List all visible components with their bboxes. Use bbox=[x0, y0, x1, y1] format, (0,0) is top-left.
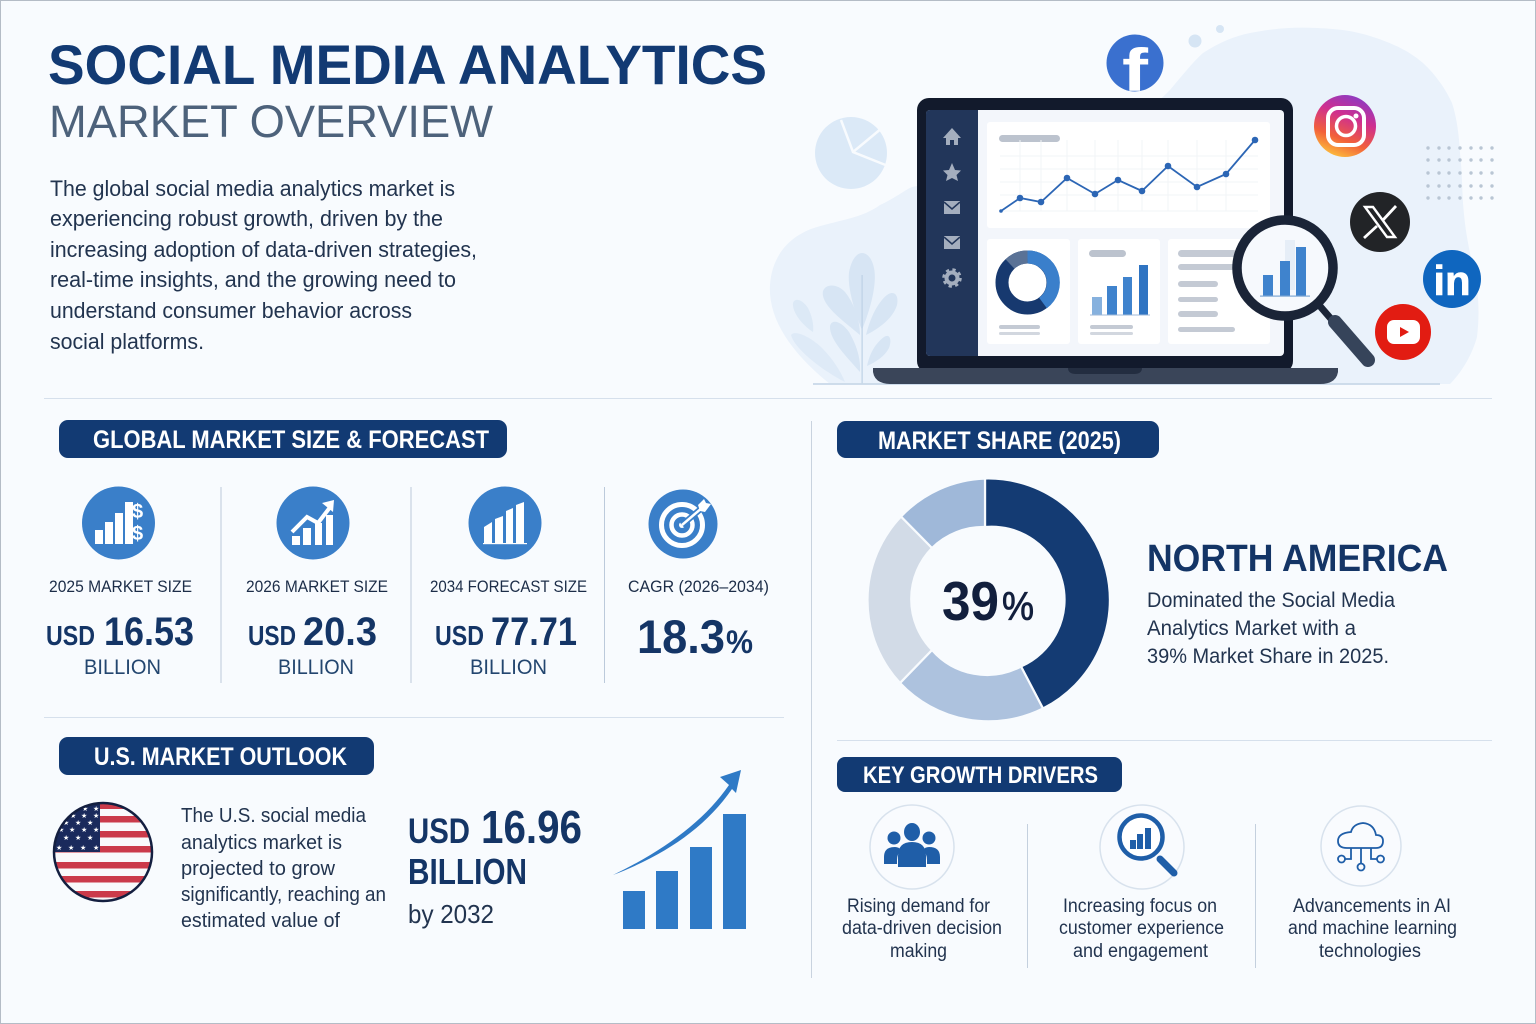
stat: 2026 market size: BILLION bbox=[278, 656, 354, 679]
panel: market share bbox=[837, 421, 1448, 721]
driver separators bbox=[1028, 824, 1256, 968]
driver: customer experience: customer experience bbox=[1059, 918, 1224, 939]
icon: US flag: ★★★★ bbox=[56, 844, 99, 852]
growth bar chart with arrow bbox=[613, 770, 746, 929]
stat: 2025 market size: 2025 MARKET SIZE bbox=[49, 577, 192, 596]
driver: AI and machine learning: Advancements in AI bbox=[1293, 896, 1451, 917]
heading: market share: MARKET SHARE (2025) bbox=[878, 427, 1121, 455]
intro paragraph: experiencing robust growth, driven by the bbox=[50, 206, 443, 231]
sidebar icons bbox=[943, 128, 961, 286]
icon: youtube bbox=[1375, 304, 1431, 360]
icon: facebook: f bbox=[1122, 37, 1149, 104]
heading: global market: GLOBAL MARKET SIZE & FORECAST bbox=[93, 426, 489, 454]
U.S. value: USD bbox=[408, 812, 470, 851]
heading: key growth drivers bbox=[837, 757, 1122, 792]
icon: US flag: ★★ bbox=[82, 805, 99, 813]
stat: 2034 forecast size: 2034 FORECAST SIZE bbox=[430, 577, 587, 596]
U.S. value: 16.96 bbox=[481, 801, 582, 853]
title: SOCIAL MEDIA ANALYTICS bbox=[48, 33, 767, 96]
stat: CAGR: 18.3 bbox=[637, 610, 725, 663]
intro paragraph: The global social media analytics market is bbox=[50, 176, 455, 201]
U.S. outlook text: analytics market is bbox=[181, 832, 342, 854]
driver: data-driven decision making bbox=[842, 805, 1002, 962]
stat: 2025 market size: $ bbox=[132, 501, 143, 523]
dividers bbox=[44, 398, 1492, 978]
stat: 2025 market size: USD bbox=[46, 620, 95, 651]
region callout bbox=[1147, 538, 1448, 668]
driver: data-driven decision making: data-driven decision bbox=[842, 918, 1002, 939]
stat: 2026 market size: USD bbox=[248, 620, 296, 651]
plant bbox=[791, 253, 897, 384]
dot grid bbox=[1426, 146, 1494, 200]
heading: key growth drivers: KEY GROWTH DRIVERS bbox=[863, 762, 1098, 789]
stat: 2034 forecast size: 77.71 bbox=[491, 610, 577, 654]
list card bbox=[1168, 239, 1270, 344]
stat: 2026 market size: 2026 MARKET SIZE bbox=[246, 577, 388, 596]
driver: data-driven decision making: Rising demand for bbox=[847, 896, 991, 917]
region callout: Analytics Market with a bbox=[1147, 617, 1356, 640]
region callout: NORTH AMERICA bbox=[1147, 538, 1448, 580]
icon: X bbox=[1350, 192, 1410, 252]
laptop base bbox=[873, 368, 1338, 384]
U.S. outlook text bbox=[181, 805, 386, 932]
decorative pie bbox=[815, 117, 888, 189]
stat: 2025 market size: $ bbox=[132, 523, 143, 545]
bar card bbox=[1078, 239, 1160, 344]
stat: 2025 market size: BILLION bbox=[84, 656, 161, 679]
icon: US flag: ★★★ bbox=[70, 812, 99, 820]
panel: global market size and forecast bbox=[46, 420, 769, 683]
stat: CAGR: % bbox=[726, 624, 753, 660]
driver: customer experience bbox=[1059, 805, 1224, 962]
donut value: 39 bbox=[942, 570, 999, 632]
background blob bbox=[770, 28, 1478, 384]
title: MARKET OVERVIEW bbox=[49, 96, 494, 147]
stat: 2034 forecast size: BILLION bbox=[470, 656, 547, 679]
icon: US flag: ★★★ bbox=[63, 834, 93, 842]
driver: customer experience: and engagement bbox=[1073, 941, 1209, 962]
heading: market share bbox=[837, 421, 1159, 458]
driver: AI and machine learning bbox=[1288, 806, 1457, 962]
panel: key growth drivers bbox=[837, 757, 1457, 968]
stat: 2025 market size: 16.53 bbox=[104, 610, 194, 654]
U.S. value: BILLION bbox=[408, 851, 527, 892]
stat: 2026 market size: 20.3 bbox=[303, 610, 377, 654]
region callout: 39% Market Share in 2025. bbox=[1147, 645, 1389, 668]
intro paragraph: increasing adoption of data-driven strategies, bbox=[50, 237, 477, 262]
decorative bubbles bbox=[1188, 25, 1224, 48]
donut chart bbox=[867, 478, 1110, 721]
stat: CAGR bbox=[628, 490, 769, 663]
driver: data-driven decision making: making bbox=[890, 941, 947, 962]
donut value bbox=[942, 570, 1034, 632]
stat: 2034 forecast size bbox=[430, 486, 587, 679]
stat: 2026 market size bbox=[246, 486, 388, 679]
intro paragraph: social platforms. bbox=[50, 329, 204, 354]
U.S. outlook text: The U.S. social media bbox=[181, 805, 367, 827]
icon: US flag: ★★★★ bbox=[58, 826, 99, 834]
U.S. outlook text: projected to grow bbox=[181, 858, 336, 880]
donut value: % bbox=[1002, 585, 1034, 629]
stat: 2034 forecast size: USD bbox=[435, 620, 484, 651]
driver: customer experience: Increasing focus on bbox=[1063, 896, 1217, 917]
U.S. outlook text: significantly, reaching an bbox=[181, 884, 386, 906]
icon: US flag bbox=[50, 800, 156, 904]
panel: U.S. market outlook bbox=[50, 737, 746, 932]
U.S. value bbox=[408, 801, 582, 929]
U.S. value: by 2032 bbox=[408, 899, 494, 929]
icon: linkedin: in bbox=[1433, 257, 1471, 304]
ground line bbox=[813, 383, 1440, 385]
intro paragraph: real-time insights, and the growing need to bbox=[50, 267, 456, 292]
magnifying glass bbox=[1237, 220, 1368, 360]
icon: linkedin bbox=[1423, 250, 1481, 308]
stat: 2025 market size bbox=[46, 486, 194, 679]
heading: U.S. outlook: U.S. MARKET OUTLOOK bbox=[94, 743, 347, 771]
hero illustration bbox=[770, 25, 1494, 384]
U.S. outlook text: estimated value of bbox=[181, 910, 340, 932]
heading: U.S. outlook bbox=[59, 737, 374, 775]
title bbox=[48, 33, 767, 147]
icon: instagram bbox=[1314, 95, 1376, 157]
region callout: Dominated the Social Media bbox=[1147, 589, 1395, 612]
heading: global market bbox=[59, 420, 507, 458]
icon: facebook bbox=[1106, 34, 1164, 104]
laptop bbox=[873, 98, 1338, 384]
line chart card bbox=[987, 122, 1270, 228]
intro paragraph bbox=[50, 176, 477, 354]
intro paragraph: understand consumer behavior across bbox=[50, 298, 412, 323]
icon: US flag: ★★★ bbox=[63, 819, 93, 827]
stat: CAGR: CAGR (2026–2034) bbox=[628, 577, 769, 596]
donut card bbox=[987, 239, 1070, 344]
driver: AI and machine learning: and machine learning bbox=[1288, 918, 1457, 939]
driver: AI and machine learning: technologies bbox=[1319, 941, 1421, 962]
stat separators bbox=[221, 487, 604, 683]
